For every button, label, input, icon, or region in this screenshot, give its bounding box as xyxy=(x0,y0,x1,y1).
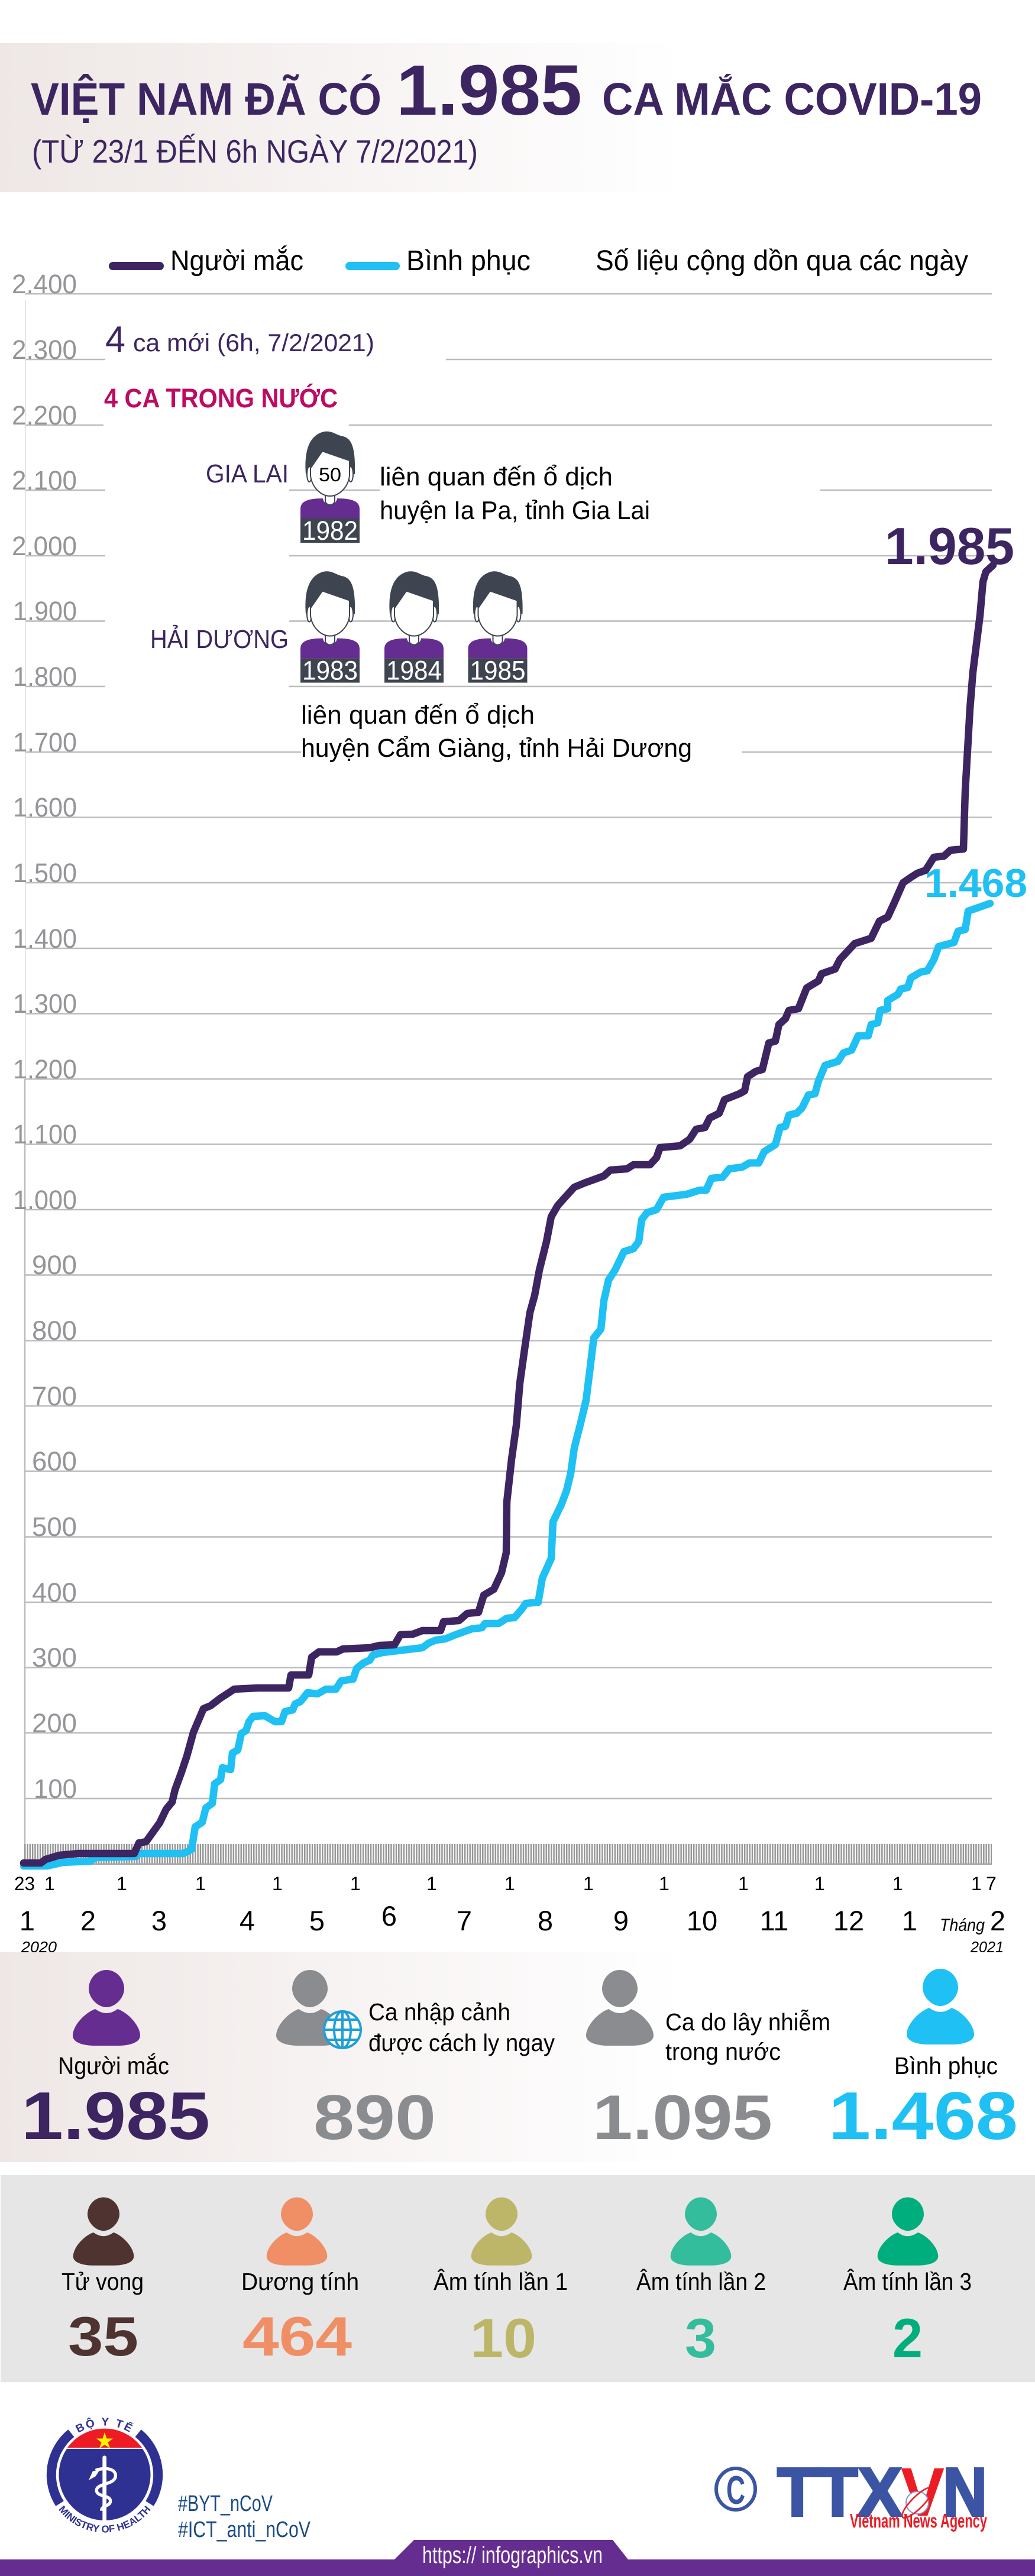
stat: recovered xyxy=(829,1969,1018,2154)
x axis months: 11 xyxy=(760,1905,788,1936)
footer bar: https:// infographics.vn xyxy=(422,2542,603,2568)
x axis day ticks: 1 xyxy=(44,1873,55,1894)
new cases heading: ca mới (6h, 7/2/2021) xyxy=(133,329,374,357)
stat: negative once xyxy=(434,2197,568,2369)
stat: imported: Ca nhập cảnh xyxy=(368,1998,510,2026)
axis notes xyxy=(21,1916,1004,1956)
y axis labels: 2.300 xyxy=(12,335,77,365)
title: 1.985 xyxy=(396,50,582,130)
x axis months xyxy=(20,1900,1005,1936)
x axis day ticks: 1 xyxy=(426,1873,437,1894)
Hai Duong cases xyxy=(150,571,692,763)
x axis months: 8 xyxy=(538,1905,553,1936)
stat: deaths xyxy=(62,2197,144,2367)
x axis day ticks: 1 xyxy=(504,1873,515,1894)
x axis day ticks: 7 xyxy=(986,1873,997,1894)
stat: negative once: Âm tính lần 1 xyxy=(434,2268,568,2295)
x axis day ticks: 23 xyxy=(14,1873,35,1894)
panel: treatment status xyxy=(1,2175,1035,2382)
y axis labels: 1.200 xyxy=(13,1054,77,1084)
stat: negative twice: 3 xyxy=(685,2307,716,2369)
y axis labels: 500 xyxy=(32,1512,77,1542)
value label: recovered: 1.468 xyxy=(924,861,1027,906)
stat: domestic: trong nước xyxy=(665,2038,781,2065)
Gia Lai case xyxy=(206,432,650,546)
x axis months: 12 xyxy=(833,1905,864,1936)
icon: patient 1984: 1984 xyxy=(386,656,442,686)
logo: TTXVN: V xyxy=(901,2454,945,2530)
stat: deaths: Tử vong xyxy=(62,2268,144,2295)
stat: negative once: 10 xyxy=(470,2307,536,2369)
stat: domestic: 1.095 xyxy=(593,2082,772,2153)
stat: imported: 890 xyxy=(313,2082,436,2153)
hashtags: #ICT_anti_nCoV xyxy=(178,2517,311,2542)
x axis day ticks: 1 xyxy=(892,1873,903,1894)
stat: positive xyxy=(241,2197,359,2367)
y axis labels: 2.000 xyxy=(12,531,77,561)
stat: negative three times: 2 xyxy=(892,2307,923,2369)
stat: confirmed: 1.985 xyxy=(21,2079,210,2154)
logo: Ministry of Health xyxy=(46,2418,163,2533)
y axis labels: 1.800 xyxy=(13,662,77,692)
Hai Duong cases: HẢI DƯƠNG xyxy=(150,624,289,654)
icon: patient 1983: 1983 xyxy=(302,656,358,686)
x axis months: 2 xyxy=(80,1905,96,1936)
Gia Lai case: huyện Ia Pa, tỉnh Gia Lai xyxy=(380,496,650,525)
y axis labels: 300 xyxy=(32,1642,77,1673)
y axis labels: 700 xyxy=(32,1381,77,1411)
y axis labels: 600 xyxy=(32,1446,77,1476)
stat: deaths: 35 xyxy=(68,2305,138,2367)
Gia Lai case: GIA LAI xyxy=(206,459,289,488)
subtitle: (TỪ 23/1 ĐẾN 6h NGÀY 7/2/2021) xyxy=(32,133,478,170)
logo: Ministry of Health: BỘ Y TẾ xyxy=(75,2418,134,2432)
x axis day ticks xyxy=(14,1873,997,1894)
x axis day ticks: 1 xyxy=(738,1873,749,1894)
line chart xyxy=(12,269,1027,1956)
stat: positive: 464 xyxy=(242,2305,352,2367)
x axis day ticks: 1 xyxy=(583,1873,594,1894)
icon: patient 1982: 50 xyxy=(319,464,341,485)
title: VIỆT NAM ĐÃ CÓ xyxy=(31,73,381,125)
x axis months: 7 xyxy=(457,1905,472,1936)
stat: domestic: Ca do lây nhiễm xyxy=(665,2008,830,2036)
Gia Lai case: liên quan đến ổ dịch xyxy=(380,462,613,491)
confirmed curve xyxy=(24,565,993,1863)
icon: patient 1983 xyxy=(300,571,360,686)
legend: Người mắc xyxy=(170,245,303,277)
x axis day ticks: 1 xyxy=(814,1873,825,1894)
logo: Ministry of Health: MINISTRY OF HEALTH xyxy=(59,2506,151,2533)
y axis labels: 1.000 xyxy=(13,1185,77,1215)
x axis months: 2 xyxy=(990,1905,1005,1936)
icon: patient 1985: 1985 xyxy=(470,656,525,686)
footer bar xyxy=(0,2540,1035,2576)
legend: Bình phục xyxy=(406,245,531,277)
x axis months: 5 xyxy=(309,1905,325,1936)
stat: negative three times: Âm tính lần 3 xyxy=(843,2268,972,2295)
x axis day ticks: 1 xyxy=(117,1873,127,1894)
Hai Duong cases: liên quan đến ổ dịch xyxy=(301,701,535,730)
hashtags xyxy=(178,2491,311,2542)
stat: negative twice xyxy=(636,2197,766,2369)
y axis labels: 2.200 xyxy=(12,400,77,430)
stat: imported xyxy=(276,1970,555,2153)
stat: negative twice: Âm tính lần 2 xyxy=(636,2268,766,2295)
x axis months: 9 xyxy=(613,1905,629,1936)
axis notes: 2021 xyxy=(970,1938,1004,1956)
new cases heading: 4 xyxy=(105,319,125,360)
icon: globe xyxy=(324,2011,361,2048)
y axis labels: 200 xyxy=(32,1708,77,1738)
x axis day ticks: 1 xyxy=(659,1873,669,1894)
x axis day ticks: 1 xyxy=(350,1873,361,1894)
legend xyxy=(113,245,968,277)
x axis months: 1 xyxy=(902,1905,917,1936)
x axis day ticks: 1 xyxy=(971,1873,982,1894)
y axis labels: 800 xyxy=(32,1315,77,1346)
logo: TTXVN: N xyxy=(943,2454,987,2530)
logo: TTXVN: TTX xyxy=(777,2454,902,2530)
y axis labels: 1.100 xyxy=(13,1119,77,1149)
icon: patient 1982: 1982 xyxy=(302,516,358,546)
stat: domestic xyxy=(586,1970,830,2153)
panel: totals xyxy=(0,1952,1035,2162)
title xyxy=(31,50,982,130)
y axis labels: 2.100 xyxy=(12,465,77,495)
domestic cases heading: 4 CA TRONG NƯỚC xyxy=(104,383,338,413)
stat: imported: được cách ly ngay xyxy=(368,2029,555,2056)
y axis labels: 1.300 xyxy=(13,989,77,1019)
stat: recovered: Bình phục xyxy=(894,2052,998,2079)
logo: TTXVN xyxy=(716,2454,987,2532)
stat: recovered: 1.468 xyxy=(829,2079,1018,2154)
x axis months: 3 xyxy=(151,1905,167,1936)
hatched date band xyxy=(24,1844,992,1865)
x axis day ticks: 1 xyxy=(272,1873,283,1894)
x axis months: 1 xyxy=(20,1905,35,1936)
y axis labels: 400 xyxy=(32,1577,77,1608)
icon: patient 1985 xyxy=(468,571,528,686)
x axis months: 10 xyxy=(687,1905,717,1936)
hashtags: #BYT_nCoV xyxy=(178,2491,273,2516)
y axis labels: 1.700 xyxy=(13,727,77,757)
Hai Duong cases: huyện Cẩm Giàng, tỉnh Hải Dương xyxy=(301,734,692,763)
y axis labels: 1.500 xyxy=(13,858,77,888)
y axis labels xyxy=(12,269,77,1804)
axis notes: 2020 xyxy=(21,1938,57,1956)
icon: patient 1982 xyxy=(300,432,360,546)
x axis months: 4 xyxy=(240,1905,255,1936)
stat: confirmed: Người mắc xyxy=(58,2052,169,2079)
stat: positive: Dương tính xyxy=(241,2268,359,2295)
logo: TTXVN: C xyxy=(726,2468,745,2513)
y axis labels: 1.900 xyxy=(13,596,77,626)
stat: negative three times xyxy=(843,2197,972,2369)
new cases heading xyxy=(105,319,374,360)
legend: Số liệu cộng dồn qua các ngày xyxy=(596,245,968,277)
y axis labels: 1.600 xyxy=(13,792,77,822)
x axis months: 6 xyxy=(381,1900,397,1932)
icon: patient 1984 xyxy=(384,571,444,686)
x axis day ticks: 1 xyxy=(195,1873,206,1894)
stat: confirmed xyxy=(21,1970,210,2154)
title: CA MẮC COVID-19 xyxy=(602,73,982,125)
axis notes: Tháng xyxy=(940,1916,985,1935)
recovered curve xyxy=(24,903,990,1866)
value label: confirmed: 1.985 xyxy=(885,517,1014,575)
y axis labels: 2.400 xyxy=(12,269,77,299)
y axis labels: 100 xyxy=(34,1774,77,1804)
y axis labels: 1.400 xyxy=(13,924,77,954)
y axis labels: 900 xyxy=(32,1250,77,1280)
header band xyxy=(0,43,1035,192)
